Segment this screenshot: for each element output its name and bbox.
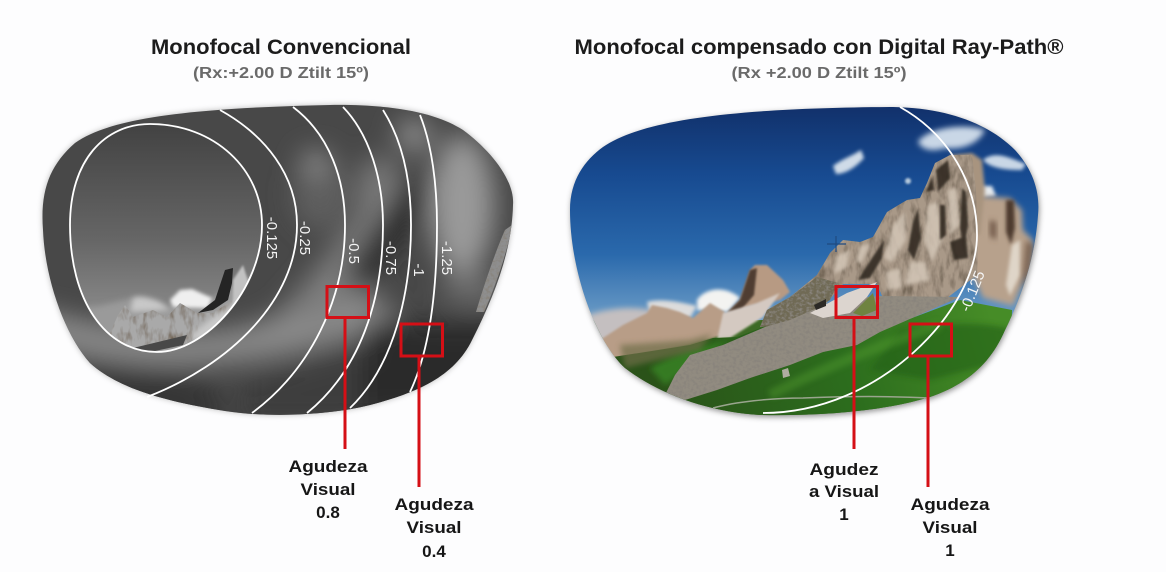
heading: right lens: Monofocal compensado con Digital Ray-Path® <box>574 36 1064 59</box>
snow patch <box>810 282 877 318</box>
label: agudeza visual 1 periphery: Visual <box>922 518 978 537</box>
distant mountains <box>600 303 725 360</box>
contour labels: -1 <box>410 263 427 277</box>
scree <box>665 296 960 400</box>
contour labels: -0.25 <box>296 221 313 255</box>
contour labels: -1.25 <box>438 241 455 275</box>
heading: left lens: (Rx:+2.00 D Ztilt 15º) <box>193 65 369 82</box>
label: agudeza visual 1 periphery <box>910 495 990 560</box>
panel: compensated lens, colour photo <box>560 100 1050 425</box>
label: agudeza visual 0.4 <box>394 495 474 561</box>
cross mark <box>827 236 846 252</box>
infographic canvas <box>40 38 1064 557</box>
ridge <box>760 277 838 327</box>
clouds <box>918 127 985 150</box>
contour line <box>763 107 977 413</box>
label: agudeza visual 0.8 <box>288 457 368 522</box>
contour label: -0.125 <box>957 268 989 314</box>
blurred far massif outside contour <box>970 195 1033 306</box>
label: agudeza visual 0.8: Agudeza <box>288 457 368 476</box>
sharp zone inside the -0.125 contour <box>71 169 261 351</box>
main massif <box>760 155 978 327</box>
heading: right lens <box>574 36 1064 82</box>
label: agudeza visual 1 centre: Agudez <box>810 460 878 479</box>
label: agudeza visual 1 centre: a Visual <box>809 482 879 501</box>
contour labels: -0.125 <box>263 217 280 259</box>
blurred rocks at lens edge <box>476 225 512 312</box>
contour labels <box>263 217 455 277</box>
label: agudeza visual 0.4: 0.4 <box>422 542 446 561</box>
marker: acuity 0.8 <box>327 286 368 449</box>
label: agudeza visual 1 periphery: Agudeza <box>910 495 990 514</box>
label: agudeza visual 1 centre: 1 <box>839 505 849 524</box>
panel: conventional lens, greyscale photo with contour lines <box>40 102 516 418</box>
label: agudeza visual 0.4: Visual <box>406 518 462 537</box>
label: agudeza visual 1 centre <box>809 460 879 524</box>
marker: acuity 0.4 <box>401 324 442 487</box>
contour labels: -0.5 <box>345 238 362 264</box>
contour labels: -0.75 <box>382 241 399 275</box>
heading: right lens: (Rx +2.00 D Ztilt 15º) <box>732 65 906 82</box>
marker: acuity 1 periphery <box>910 324 952 487</box>
label: agudeza visual 0.4: Agudeza <box>394 495 474 514</box>
marker: acuity 1 centre <box>836 286 878 449</box>
heading: left lens: Monofocal Convencional <box>151 36 411 59</box>
contour lines <box>70 107 437 413</box>
label: agudeza visual 0.8: Visual <box>300 480 356 499</box>
heading: left lens <box>151 36 411 82</box>
massif light faces <box>834 188 960 290</box>
label: agudeza visual 1 periphery: 1 <box>945 541 955 560</box>
green slope <box>613 300 1012 425</box>
label: agudeza visual 0.8: 0.8 <box>316 503 340 522</box>
massif shadows <box>858 160 968 280</box>
